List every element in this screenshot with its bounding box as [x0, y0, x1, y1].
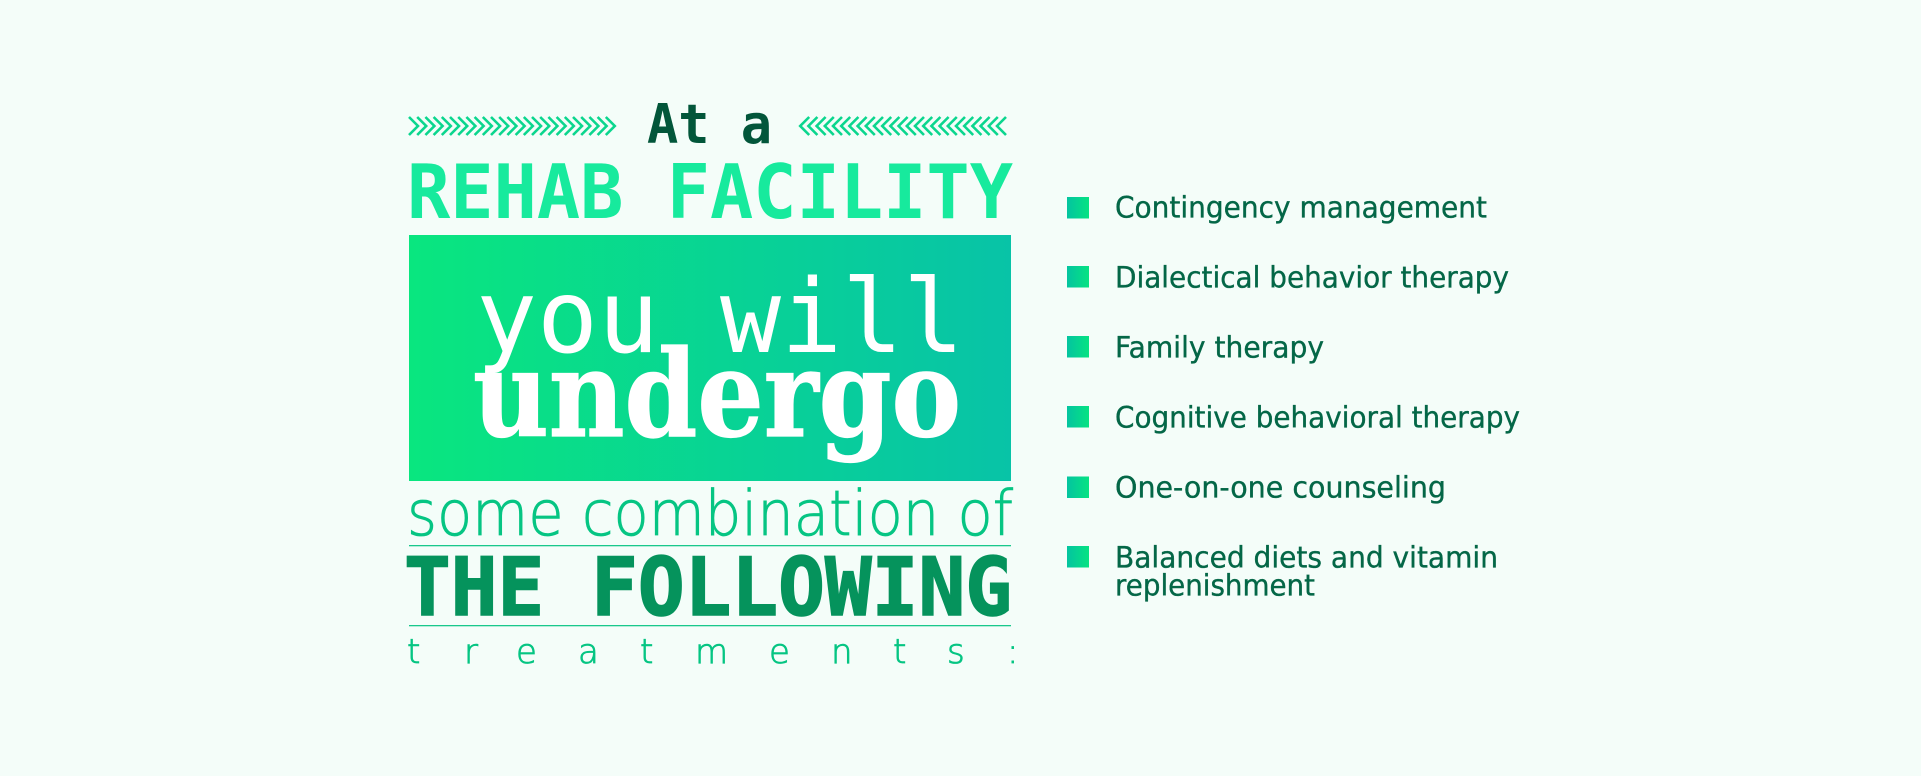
gradient banner — [409, 235, 1011, 481]
item: Balanced diets and vitamin replenishment — [1067, 540, 1498, 603]
heading: REHAB FACILITY: REHAB FACILITY — [407, 148, 1013, 236]
heading: At a: At a — [647, 93, 772, 156]
item: One-on-one counseling: One-on-one counseling — [1115, 471, 1446, 505]
treatment list — [1067, 191, 1520, 603]
item: Dialectical behavior therapy: Dialectical behavior therapy — [1115, 260, 1509, 294]
item: Cognitive behavioral therapy: Cognitive behavioral therapy — [1115, 400, 1520, 434]
right chevron strip — [800, 117, 1006, 135]
banner text: you will: you will — [476, 258, 964, 377]
left chevron strip — [409, 117, 615, 135]
banner text: undergo: undergo — [473, 324, 961, 465]
heading: some combination of: some combination of — [407, 477, 1013, 550]
item: Family therapy: Family therapy — [1115, 331, 1324, 365]
heading: THE FOLLOWING: THE FOLLOWING — [404, 541, 1012, 634]
item: Balanced diets and vitamin replenishment: replenishment — [1115, 569, 1315, 603]
title panel — [404, 93, 1018, 672]
heading: treatments: treatments: — [407, 632, 1018, 672]
item: Balanced diets and vitamin replenishment: Balanced diets and vitamin — [1115, 540, 1498, 574]
item: Contingency management: Contingency management — [1115, 191, 1487, 225]
